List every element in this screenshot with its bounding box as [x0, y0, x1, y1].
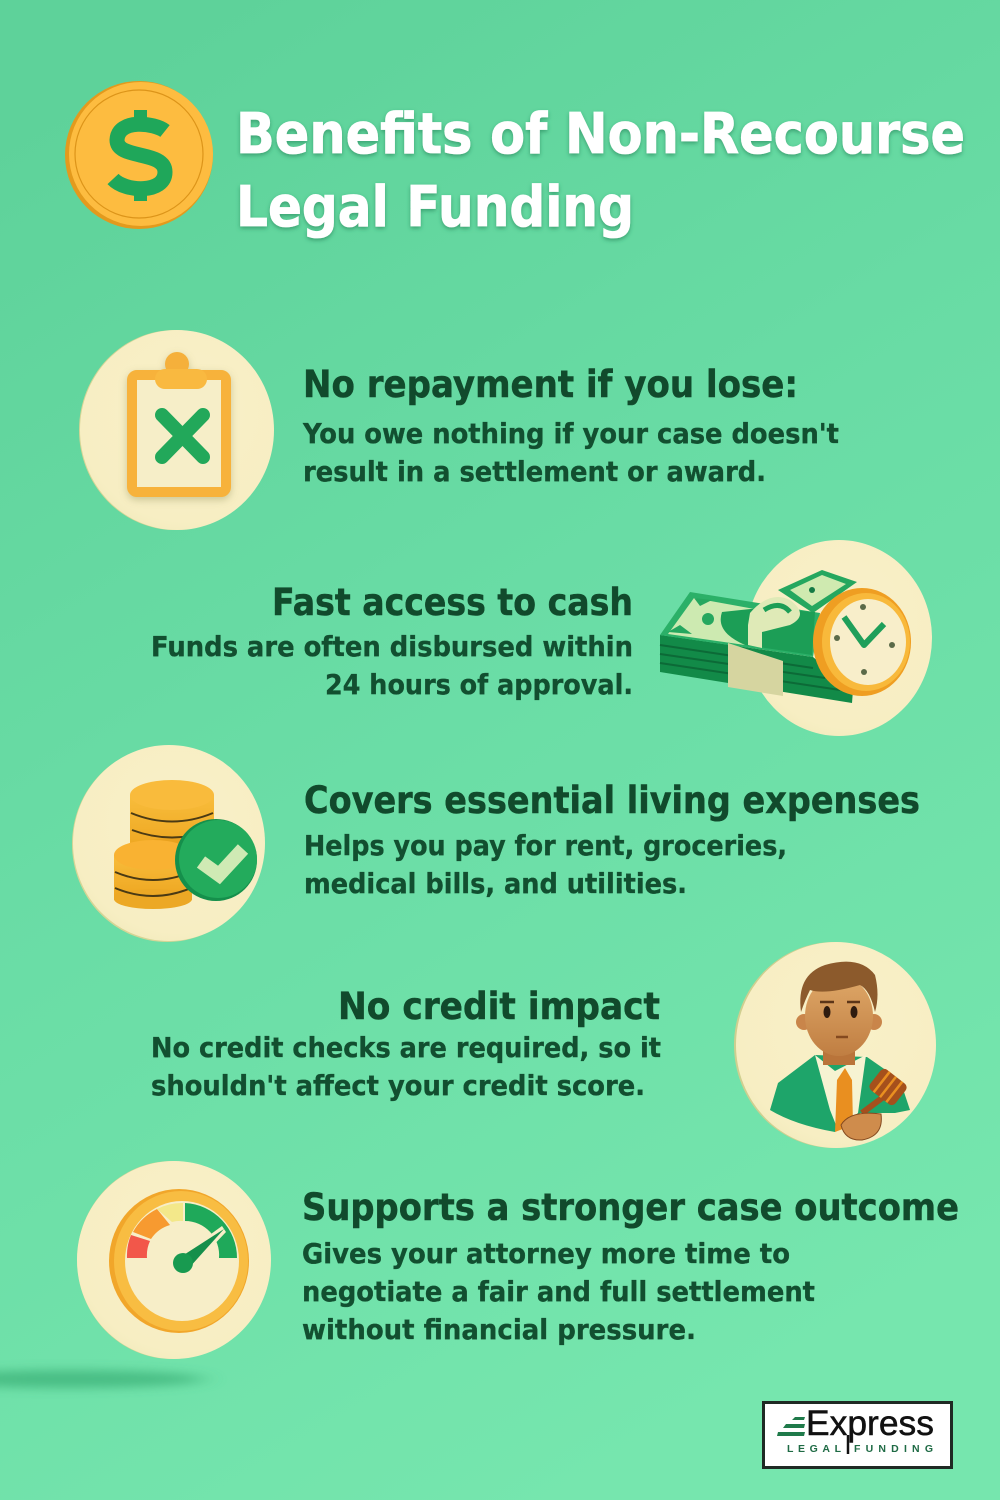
icon: gauge	[77, 1161, 271, 1359]
body text: Gives your attorney more time to	[302, 1237, 790, 1270]
icon: coins with check	[72, 745, 265, 942]
panel: case outcome	[77, 1161, 959, 1359]
body text: shouldn't affect your credit score.	[151, 1069, 645, 1102]
title	[236, 102, 965, 240]
icon: clipboard with X	[79, 330, 274, 530]
body text: 24 hours of approval.	[325, 668, 633, 701]
body text	[302, 1237, 815, 1346]
panel: fast access	[151, 540, 932, 736]
body text	[151, 1031, 661, 1102]
body text: Funds are often disbursed within	[151, 630, 633, 663]
heading: No credit impact	[338, 985, 660, 1028]
logo: Express Legal Funding	[764, 1402, 952, 1468]
body text: result in a settlement or award.	[303, 455, 766, 488]
heading: Covers essential living expenses	[304, 779, 920, 822]
panel: no repayment	[79, 330, 839, 530]
icon: dollar coin	[65, 81, 213, 229]
body text: without financial pressure.	[302, 1313, 696, 1346]
heading: No repayment if you lose:	[303, 363, 798, 406]
body text: negotiate a fair and full settlement	[302, 1275, 815, 1308]
body text: No credit checks are required, so it	[151, 1031, 661, 1064]
icon: cash stack and clock	[660, 540, 932, 736]
logo: Express Legal Funding: LEGAL	[787, 1443, 842, 1455]
panel: credit impact	[151, 942, 936, 1148]
icon: attorney with gavel	[734, 942, 936, 1148]
heading: Fast access to cash	[272, 581, 633, 624]
logo: Express Legal Funding: FUNDING	[854, 1443, 933, 1455]
title: Legal Funding	[236, 175, 634, 240]
body text: You owe nothing if your case doesn't	[302, 417, 839, 450]
floor shadow	[0, 1370, 205, 1388]
logo: Express Legal Funding: Express	[806, 1404, 934, 1443]
body text	[304, 829, 787, 900]
body text: Helps you pay for rent, groceries,	[304, 829, 787, 862]
body text: medical bills, and utilities.	[304, 867, 687, 900]
body text	[151, 630, 633, 701]
body text	[302, 417, 839, 488]
panel: living expenses	[72, 745, 920, 942]
